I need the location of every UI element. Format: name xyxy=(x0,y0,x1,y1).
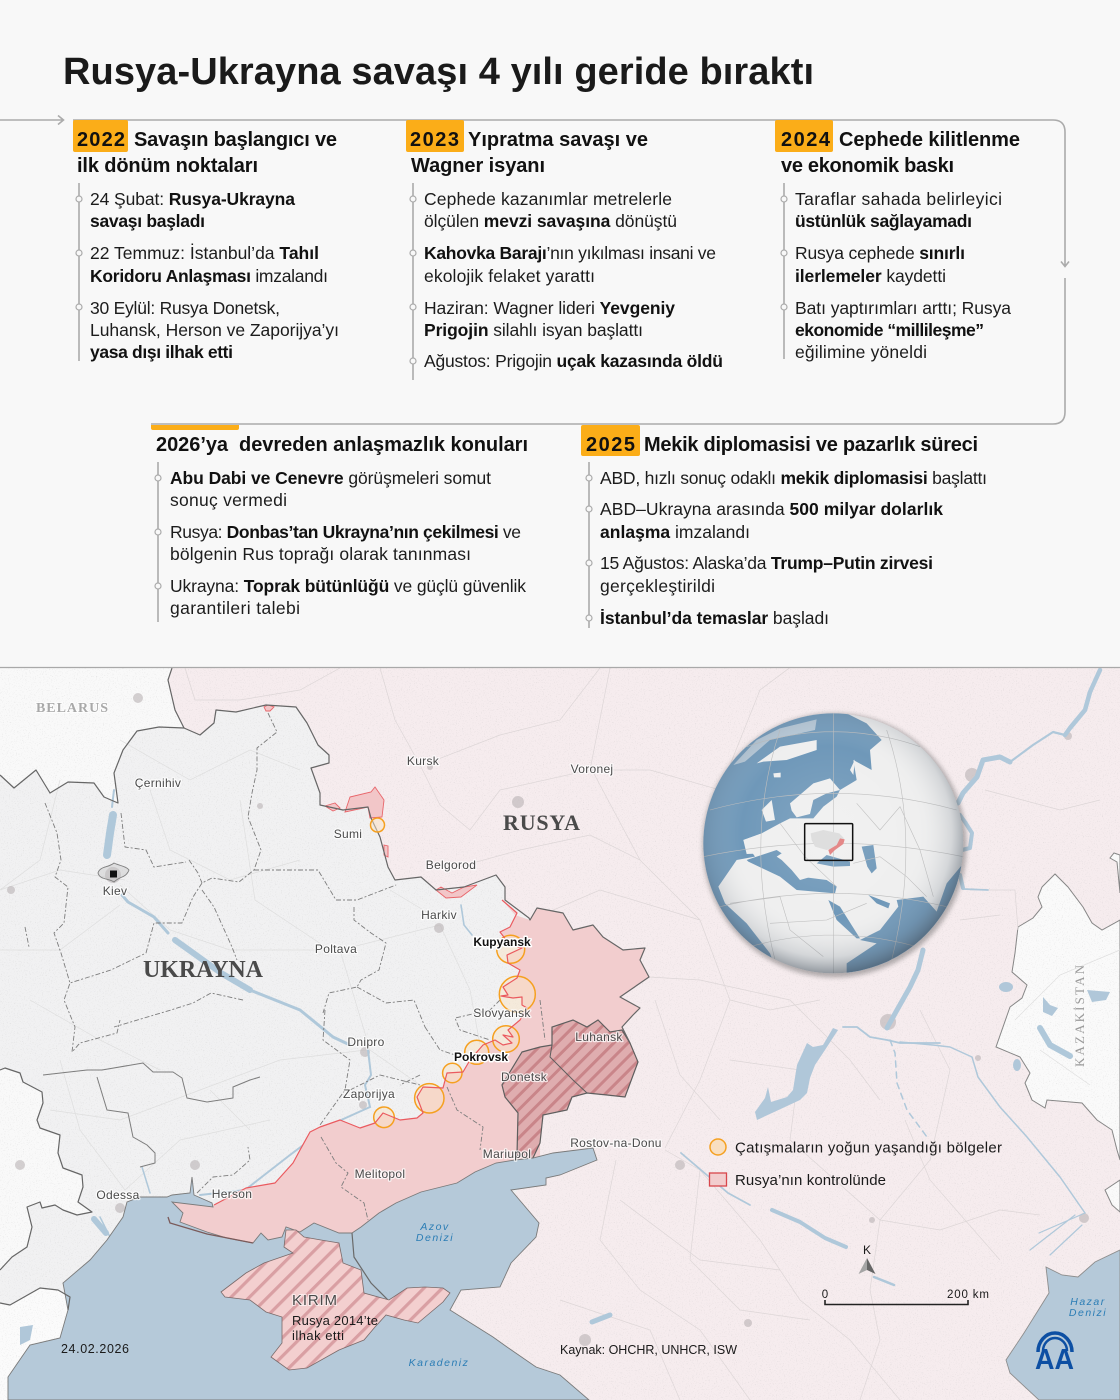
text block 2026: Rusya: Donbas’tan Ukrayna’nın çekilmesi ve xyxy=(170,522,521,542)
region: Romania xyxy=(0,1288,70,1400)
place labels: Rostov-na-Donu xyxy=(570,1136,662,1150)
region: Moldova xyxy=(0,1068,92,1270)
timeline connector arrow xyxy=(0,116,1069,424)
rivers xyxy=(94,670,1100,1322)
text block 2024: ilerlemeler kaydetti xyxy=(795,266,946,286)
heading 2025: Mekik diplomasisi ve pazarlık süreci xyxy=(644,434,978,456)
text block 2023: Cephede kazanımlar metrelerle xyxy=(424,189,672,209)
globe shadow xyxy=(703,713,967,977)
text block 2023: ekolojik felaket yarattı xyxy=(424,266,595,286)
lakes xyxy=(20,982,1110,1345)
legend: conflict zones: Çatışmaların yoğun yaşandığı bölgeler xyxy=(735,1140,1002,1156)
place labels: BELARUS xyxy=(36,701,108,716)
place labels: Donetsk xyxy=(501,1070,548,1084)
year badge 2022: 2022 xyxy=(77,129,125,151)
text block 2026: sonuç vermedi xyxy=(170,490,287,510)
place labels: ilhak etti xyxy=(292,1328,344,1343)
text block 2025 xyxy=(600,468,987,628)
date: 24.02.2026 xyxy=(61,1342,129,1356)
region: Kazakhstan xyxy=(996,853,1120,1212)
heading 2024: Cephede kilitlenme xyxy=(839,129,1020,151)
text block 2022 xyxy=(90,189,339,362)
panel: 2022 xyxy=(73,120,339,362)
text block 2025: ABD–Ukrayna arasında 500 milyar dolarlık xyxy=(600,499,943,519)
sea xyxy=(8,1148,597,1400)
globe Ukraine and front xyxy=(811,830,844,850)
region: Ukraine base xyxy=(0,668,649,1400)
globe xyxy=(700,711,969,980)
roads xyxy=(0,660,1120,1400)
place labels: Belgorod xyxy=(426,858,476,872)
place labels: Denizi xyxy=(416,1232,454,1244)
panel: 2025 xyxy=(581,425,987,628)
Kinburn spit xyxy=(168,1217,253,1243)
legend: Russian control: Rusya’nın kontrolünde xyxy=(735,1172,886,1189)
text block 2023: Kahovka Barajı’nın yıkılması insani ve xyxy=(424,243,716,263)
Caspian Sea xyxy=(1006,1250,1120,1400)
globe land masses xyxy=(733,719,855,880)
place labels: Rusya 2014’te xyxy=(292,1313,378,1328)
year badge 2024: 2024 xyxy=(781,129,831,151)
text block 2024: Taraflar sahada belirleyici xyxy=(795,189,1002,209)
year badge 2025 xyxy=(581,425,640,456)
place labels xyxy=(36,701,1107,1369)
place labels: Dnipro xyxy=(347,1035,385,1049)
globe shading xyxy=(703,713,963,973)
text block 2025: 15 Ağustos: Alaska’da Trump–Putin zirvesi xyxy=(600,553,933,573)
place labels: Poltava xyxy=(315,942,357,956)
texture speckle xyxy=(0,668,1120,1400)
region: Kursk and Kharkiv border incursions xyxy=(264,705,477,898)
year badge 2024 xyxy=(775,120,833,152)
place labels: Melitopol xyxy=(355,1167,405,1181)
timeline rail 2024 xyxy=(781,183,787,359)
text block 2025: anlaşma imzalandı xyxy=(600,522,750,542)
text block 2023: Haziran: Wagner lideri Yevgeniy xyxy=(424,298,675,318)
heading 2022 xyxy=(77,129,337,177)
region: Donetsk and Luhansk hatched xyxy=(502,1020,638,1160)
map top rule xyxy=(0,666,1120,668)
place labels: Azov xyxy=(419,1221,450,1233)
text block 2022: savaşı başladı xyxy=(90,211,205,231)
text block 2026 xyxy=(170,468,526,618)
place labels: RUSYA xyxy=(503,810,580,835)
orange tab 2026 xyxy=(151,425,239,430)
Donetsk-Luhansk divider xyxy=(550,1045,587,1093)
icon: Kyiv capital marker xyxy=(110,870,117,878)
panel: 2026 xyxy=(151,425,528,622)
place labels: Karadeniz xyxy=(409,1357,469,1369)
text block 2026: Ukrayna: Toprak bütünlüğü ve güçlü güvenlik xyxy=(170,576,526,596)
place labels: Mariupol xyxy=(483,1147,531,1161)
timeline rail 2025 xyxy=(586,462,592,628)
text block 2024: eğilimine yöneldi xyxy=(795,342,927,362)
place labels: Kupyansk xyxy=(473,935,531,949)
place labels: Denizi xyxy=(1069,1307,1107,1319)
place labels: Kiev xyxy=(103,884,127,898)
border lines xyxy=(0,668,649,1310)
oblast borders xyxy=(25,713,545,1220)
map xyxy=(0,660,1120,1400)
icon: north arrow: K xyxy=(863,1243,871,1257)
scale bar xyxy=(822,1289,989,1304)
text block 2024: ekonomide “millileşme” xyxy=(795,320,984,340)
place labels: KAZAKİSTAN xyxy=(1072,964,1087,1067)
title: Rusya-Ukrayna savaşı 4 yılı geride bıraktı xyxy=(63,51,814,93)
year badge 2025: 2025 xyxy=(586,434,635,456)
place labels: Kursk xyxy=(407,754,440,768)
text block 2026: garantileri talebi xyxy=(170,598,300,618)
place labels: Harkiv xyxy=(421,908,457,922)
year badge 2023 xyxy=(406,120,464,152)
source: Kaynak: OHCHR, UNHCR, ISW xyxy=(560,1343,737,1357)
text block 2025: ABD, hızlı sonuç odaklı mekik diplomasisi başlattı xyxy=(600,468,987,488)
heading 2024 xyxy=(781,129,1020,177)
conflict zone circles xyxy=(370,818,535,1128)
city spots xyxy=(7,693,1089,1346)
text block 2024 xyxy=(795,189,1011,362)
heading 2023: Wagner isyanı xyxy=(411,155,545,177)
scale bar: 0 xyxy=(822,1289,828,1301)
heading 2023: Yıpratma savaşı ve xyxy=(468,129,648,151)
text block 2022: Luhansk, Herson ve Zaporijya’yı xyxy=(90,320,339,340)
place labels: Luhansk xyxy=(575,1030,623,1044)
region: Crimea hatched xyxy=(221,1230,450,1370)
timeline rail 2026 xyxy=(155,462,161,622)
globe graticule xyxy=(703,713,963,973)
text block 2022: 22 Temmuz: İstanbul’da Tahıl xyxy=(90,243,319,263)
place labels: Herson xyxy=(212,1187,252,1201)
text block 2023 xyxy=(424,189,723,371)
text block 2022: 30 Eylül: Rusya Donetsk, xyxy=(90,298,280,318)
timeline rail 2022 xyxy=(76,183,82,361)
text block 2025: gerçekleştirildi xyxy=(600,576,715,596)
place labels: Odessa xyxy=(96,1188,140,1202)
heading 2024: ve ekonomik baskı xyxy=(781,155,954,177)
globe ocean xyxy=(703,713,882,958)
place labels: Zaporijya xyxy=(343,1087,395,1101)
front line xyxy=(214,900,527,1205)
globe locator box xyxy=(805,824,853,860)
region: Russia base xyxy=(169,668,1120,1400)
place labels: Sumi xyxy=(334,827,362,841)
heading 2026: 2026’ya devreden anlaşmazlık konuları xyxy=(156,434,528,456)
place labels: Hazar xyxy=(1070,1296,1106,1308)
text block 2024: üstünlük sağlayamadı xyxy=(795,211,972,231)
text block 2023: Ağustos: Prigojin uçak kazasında öldü xyxy=(424,351,723,371)
scale bar: 200 km xyxy=(947,1289,989,1301)
icon: AA logo: AA xyxy=(1035,1344,1074,1376)
heading 2022: ilk dönüm noktaları xyxy=(77,155,258,177)
Arabat spit xyxy=(352,1233,388,1300)
region: Russian-controlled territory xyxy=(172,900,649,1250)
year badge 2023: 2023 xyxy=(410,129,459,151)
place labels: KIRIM xyxy=(292,1292,337,1309)
timeline rail 2023 xyxy=(410,183,416,380)
legend xyxy=(710,1139,1002,1189)
place labels: UKRAYNA xyxy=(143,957,264,983)
text block 2023: Prigojin silahlı isyan başlattı xyxy=(424,320,643,340)
text block 2024: Rusya cephede sınırlı xyxy=(795,243,965,263)
place labels: Slovyansk xyxy=(473,1006,531,1020)
text block 2026: Abu Dabi ve Cenevre görüşmeleri somut xyxy=(170,468,491,488)
year badge 2022 xyxy=(73,120,128,152)
text block 2026: bölgenin Rus toprağı olarak tanınması xyxy=(170,544,471,564)
heading 2022: Savaşın başlangıcı ve xyxy=(134,129,337,151)
region: Belarus xyxy=(0,668,184,803)
text block 2023: ölçülen mevzi savaşına dönüştü xyxy=(424,211,677,231)
text block 2022: yasa dışı ilhak etti xyxy=(90,342,233,362)
place labels: Çernihiv xyxy=(135,776,181,790)
place labels: Voronej xyxy=(571,762,613,776)
text block 2022: 24 Şubat: Rusya-Ukrayna xyxy=(90,189,295,209)
text block 2022: Koridoru Anlaşması imzalandı xyxy=(90,266,328,286)
panel: 2024 xyxy=(775,120,1020,362)
icon: north arrow xyxy=(858,1243,876,1274)
text block 2024: Batı yaptırımları arttı; Rusya xyxy=(795,298,1011,318)
place labels: Pokrovsk xyxy=(454,1050,508,1064)
heading 2023 xyxy=(411,129,648,177)
text block 2025: İstanbul’da temaslar başladı xyxy=(600,608,829,628)
panel: 2023 xyxy=(406,120,723,380)
